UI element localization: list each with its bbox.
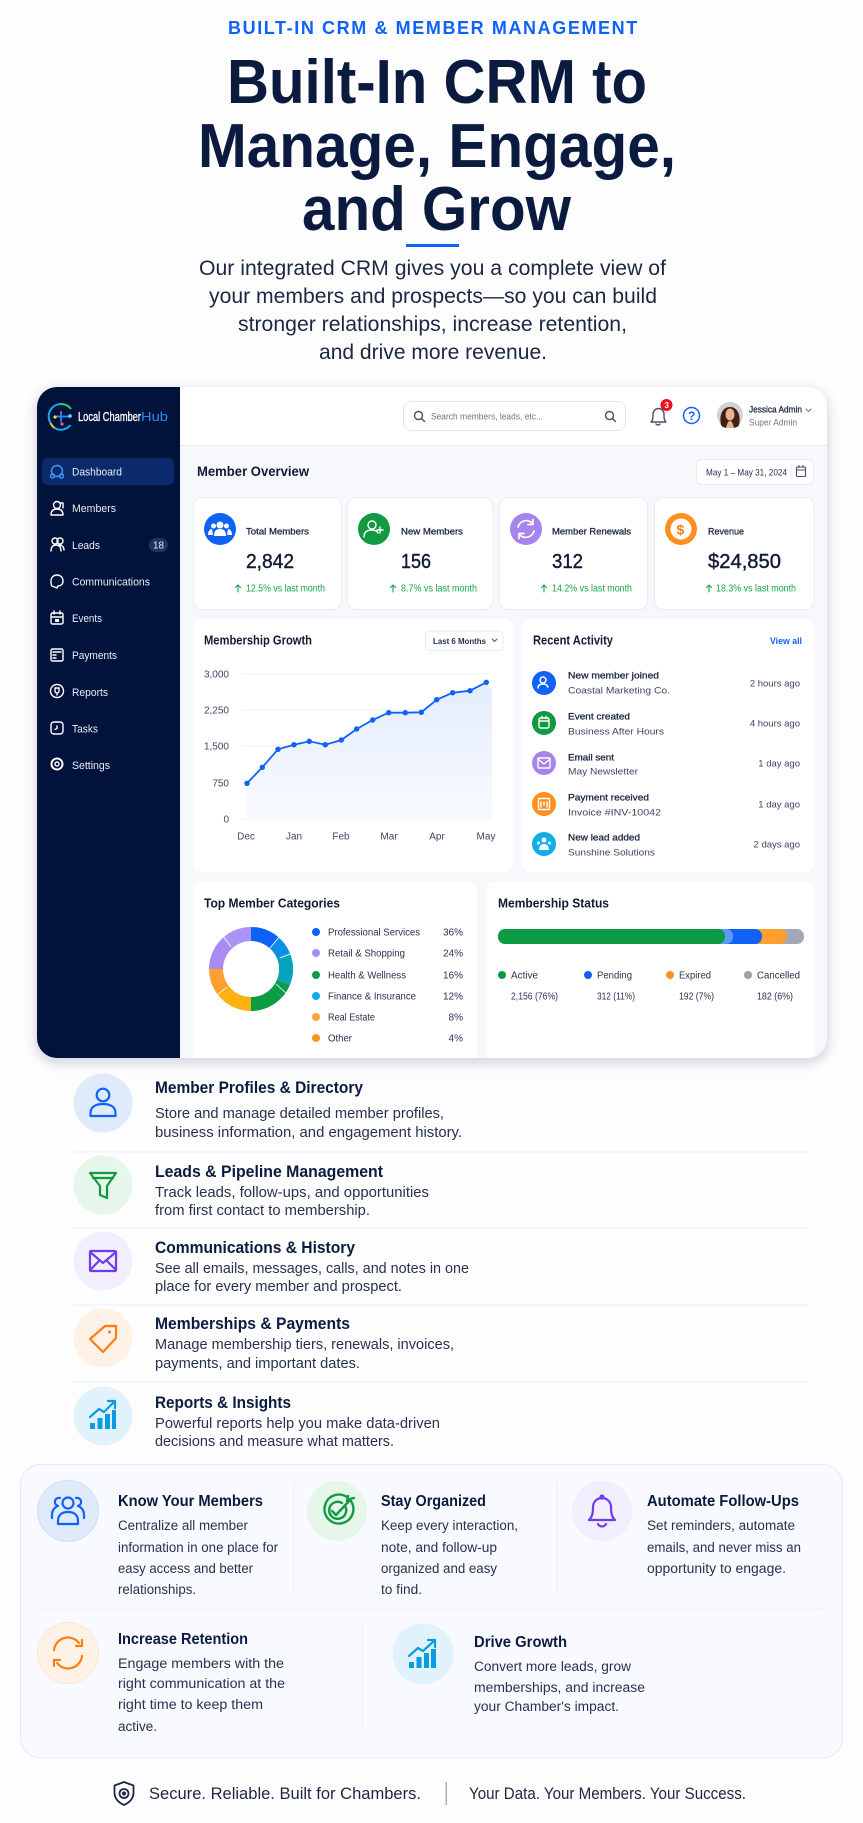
benefit: increase retention: active. (118, 1719, 157, 1734)
benefit: stay organized: Stay Organized (381, 1493, 486, 1510)
x axis labels: May (477, 832, 495, 842)
nav: communications (51, 575, 150, 588)
activity: payment received (532, 792, 800, 818)
nav: payments: Payments (72, 650, 117, 662)
benefit: know your members (38, 1480, 278, 1597)
nav: dashboard (50, 466, 122, 478)
KPI card: revenue: $24,850 (708, 551, 781, 573)
eyebrow heading: BUILT-IN CRM & MEMBER MANAGEMENT (228, 18, 639, 38)
line series (244, 680, 489, 786)
legend: 12% (443, 992, 463, 1002)
feature: member profiles: business information, and engagement history. (155, 1125, 462, 1141)
activity: new lead: 2 days ago (754, 840, 800, 850)
status legend: 312 (11%) (597, 992, 635, 1002)
activity: new member: Coastal Marketing Co. (568, 686, 670, 696)
range dropdown (426, 631, 503, 650)
panel: benefits (20, 1464, 842, 1758)
feature: member profiles: Store and manage detailed member profiles, (155, 1106, 444, 1122)
KPI card: new members (348, 498, 493, 610)
legend: Retail & Shopping (328, 948, 405, 960)
membership status content: Membership Status (498, 896, 609, 910)
nav: leads (51, 538, 168, 552)
KPI card: revenue: Revenue (708, 526, 744, 538)
KPI card: new members: New Members (401, 526, 463, 538)
benefit: automate follow-ups (572, 1481, 801, 1576)
logo: Local Chamber (78, 410, 141, 424)
section heading: Member Overview (197, 464, 309, 479)
title (198, 48, 676, 244)
benefit: automate follow-ups: emails, and never miss an (647, 1540, 801, 1555)
status legend: Pending (597, 970, 632, 982)
KPI card: member renewals (500, 498, 648, 610)
benefit: increase retention: Engage members with the (118, 1656, 284, 1671)
panel: recent activity: Recent Activity (533, 634, 613, 648)
nav: reports: Reports (72, 687, 108, 699)
feature: communications and history: Communications & History (155, 1239, 356, 1257)
title: Built-In CRM to (227, 48, 647, 117)
date range picker: May 1 – May 31, 2024 (706, 468, 787, 478)
benefit: drive growth: Convert more leads, grow (474, 1659, 631, 1674)
panel: membership growth chart (193, 619, 513, 872)
activity: email sent: Email sent (568, 752, 614, 764)
status legend: 192 (7%) (679, 992, 714, 1002)
nav: dashboard: Dashboard (72, 466, 122, 478)
activity: new member: New member joined (568, 670, 659, 682)
benefit: increase retention: Increase Retention (118, 1631, 248, 1648)
activity: new member: 2 hours ago (750, 678, 800, 690)
icon: notifications bell (651, 399, 672, 425)
y axis labels: 1,500 (204, 742, 229, 752)
benefit: know your members: information in one place for (118, 1540, 278, 1555)
KPI card: total members: Total Members (246, 526, 309, 538)
activity: new member (532, 670, 800, 696)
benefit: increase retention: right time to keep them (118, 1697, 263, 1712)
KPI card: total members: 12.5% vs last month (246, 584, 325, 594)
activity: email sent (532, 751, 800, 778)
intro paragraph (199, 257, 666, 364)
feature: communications and history (74, 1232, 469, 1295)
area under line (247, 682, 492, 819)
legend: Real Estate (328, 1012, 375, 1024)
activity: event created: 4 hours ago (750, 718, 800, 730)
sidebar navigation (42, 458, 174, 772)
legend: Health & Wellness (328, 970, 406, 982)
nav: members: Members (72, 503, 116, 515)
benefit: stay organized: Keep every interaction, (381, 1518, 518, 1533)
feature: leads and pipeline (74, 1156, 429, 1219)
KPI card: total members: 2,842 (246, 551, 294, 573)
user name: Jessica Admin (749, 404, 802, 416)
activity: new lead: New lead added (568, 832, 640, 844)
status legend: Cancelled (757, 970, 800, 982)
activity: payment received: Invoice #INV-10042 (568, 808, 661, 818)
icon: shield (114, 1782, 134, 1805)
feature: member profiles (74, 1074, 462, 1141)
top bar (404, 399, 811, 430)
stacked status bar (498, 929, 804, 944)
feature: reports and insights: Powerful reports help you make data-driven (155, 1416, 440, 1432)
feature: member profiles: Member Profiles & Directory (155, 1079, 364, 1097)
y axis labels: 2,250 (204, 706, 229, 716)
title: and Grow (302, 175, 572, 244)
benefit: stay organized (307, 1481, 518, 1597)
KPI card: member renewals: Member Renewals (552, 526, 631, 538)
logo (49, 404, 168, 430)
nav: tasks: Tasks (72, 724, 98, 736)
search box (404, 402, 626, 430)
nav: settings (52, 758, 110, 772)
KPI card: revenue (654, 498, 814, 610)
benefit: stay organized: organized and easy (381, 1561, 497, 1576)
status legend: Expired (679, 970, 711, 982)
benefit: know your members: Centralize all member (118, 1518, 248, 1533)
status legend: Active (511, 970, 538, 982)
x axis labels: Apr (429, 832, 445, 842)
nav: events (51, 611, 102, 625)
legend: 8% (449, 1012, 463, 1024)
feature: leads and pipeline: from first contact to membership. (155, 1203, 370, 1219)
icon: help (684, 408, 700, 424)
dashboard mockup (37, 387, 827, 1072)
intro paragraph: stronger relationships, increase retention, (238, 313, 627, 336)
intro paragraph: Our integrated CRM gives you a complete view of (199, 257, 666, 280)
x axis labels (237, 832, 495, 842)
panel: recent activity: View all (770, 636, 802, 647)
nav: reports (50, 684, 108, 699)
membership status content (498, 896, 804, 1002)
benefit: know your members: relationships. (118, 1582, 196, 1597)
legend: 4% (449, 1034, 463, 1044)
nav: events: Events (72, 613, 102, 625)
panel: recent activity (522, 619, 814, 872)
nav: leads: Leads (72, 540, 100, 552)
user name (749, 404, 811, 428)
y axis labels (204, 670, 229, 826)
benefit: know your members: Know Your Members (118, 1493, 263, 1510)
user avatar (717, 402, 743, 428)
title: Manage, Engage, (198, 112, 676, 181)
intro paragraph: and drive more revenue. (319, 341, 547, 364)
user name: Super Admin (749, 418, 797, 428)
activity: new lead: Sunshine Solutions (568, 848, 655, 858)
legend (312, 928, 463, 1044)
benefit: drive growth: Drive Growth (474, 1634, 567, 1651)
status legend: 182 (6%) (757, 992, 793, 1002)
panel: top member categories (193, 882, 477, 1072)
legend: 24% (443, 948, 463, 960)
KPI card: revenue: $ (676, 522, 684, 538)
x axis labels: Dec (237, 832, 255, 842)
status legend: 2,156 (76%) (511, 992, 558, 1002)
top member categories content: Top Member Categories (204, 896, 340, 910)
date range picker (696, 460, 814, 484)
footer tagline: Secure. Reliable. Built for Chambers. (149, 1784, 421, 1803)
feature: memberships and payments: payments, and important dates. (155, 1356, 360, 1372)
KPI card: member renewals: 14.2% vs last month (552, 584, 632, 594)
feature: communications and history: place for every member and prospect. (155, 1279, 402, 1295)
nav: communications: Communications (72, 576, 150, 588)
benefit: increase retention (38, 1622, 285, 1734)
benefit: know your members: easy access and better (118, 1561, 253, 1576)
feature: leads and pipeline: Track leads, follow-ups, and opportunities (155, 1185, 429, 1201)
feature: memberships and payments: Memberships & Payments (155, 1315, 350, 1333)
feature: memberships and payments (74, 1308, 454, 1372)
feature: communications and history: See all emails, messages, calls, and notes in one (155, 1261, 469, 1277)
legend: Professional Services (328, 928, 420, 938)
legend: Other (328, 1034, 353, 1044)
benefit: stay organized: to find. (381, 1582, 422, 1597)
activity: payment received: 1 day ago (758, 800, 800, 810)
feature: reports and insights: decisions and measure what matters. (155, 1434, 394, 1450)
panel: membership growth chart: Membership Growth (204, 634, 312, 648)
nav: settings: Settings (72, 760, 110, 772)
activity: email sent: 1 day ago (758, 758, 800, 770)
activity: payment received: Payment received (568, 792, 649, 804)
icon: help: ? (688, 409, 695, 423)
feature: memberships and payments: Manage membership tiers, renewals, invoices, (155, 1337, 454, 1353)
footer tagline: Your Data. Your Members. Your Success. (469, 1784, 746, 1803)
x axis labels: Feb (332, 832, 350, 842)
feature: leads and pipeline: Leads & Pipeline Management (155, 1163, 383, 1181)
footer tagline (114, 1782, 746, 1805)
feature: reports and insights: Reports & Insights (155, 1394, 291, 1412)
panel: membership status (486, 882, 814, 1072)
KPI card: member renewals: 312 (552, 551, 583, 573)
logo: Hub (141, 410, 168, 424)
y axis labels: 0 (223, 814, 229, 826)
KPI card: total members (194, 498, 342, 610)
intro paragraph: your members and prospects—so you can build (209, 285, 657, 308)
y axis labels: 3,000 (204, 670, 229, 680)
range dropdown: Last 6 Months (433, 636, 486, 646)
benefit: automate follow-ups: opportunity to engage. (647, 1561, 786, 1576)
status legend (498, 970, 800, 1002)
top member categories content (204, 896, 463, 1044)
KPI card: new members: 8.7% vs last month (401, 584, 477, 594)
KPI card: new members: 156 (401, 551, 431, 573)
benefit: increase retention: right communication at the (118, 1676, 285, 1691)
x axis labels: Jan (286, 832, 302, 842)
benefit: automate follow-ups: Automate Follow-Ups (647, 1493, 799, 1510)
icon: notifications bell: 3 (664, 401, 670, 410)
y axis labels: 750 (212, 778, 229, 790)
feature: reports and insights (74, 1386, 440, 1450)
legend: Finance & Insurance (328, 992, 416, 1002)
benefit: automate follow-ups: Set reminders, automate (647, 1518, 795, 1533)
benefit: drive growth: memberships, and increase (474, 1680, 645, 1695)
activity: email sent: May Newsletter (568, 766, 638, 778)
title accent underline (406, 244, 459, 247)
benefit: drive growth (392, 1624, 645, 1714)
activity: event created (532, 711, 800, 738)
activity: event created: Event created (568, 712, 630, 722)
x axis labels: Mar (380, 832, 398, 842)
benefit: drive growth: your Chamber's impact. (474, 1699, 619, 1714)
legend: 16% (443, 970, 463, 982)
donut chart (216, 934, 293, 1004)
KPI card: revenue: 18.3% vs last month (716, 584, 796, 594)
benefit: stay organized: note, and follow-up (381, 1540, 497, 1555)
activity: new lead (532, 832, 800, 858)
nav: tasks (51, 722, 98, 736)
nav: members (51, 502, 116, 515)
activity: event created: Business After Hours (568, 726, 664, 738)
nav: payments (51, 649, 117, 662)
legend: 36% (443, 928, 463, 938)
nav: leads: 18 (153, 540, 164, 552)
search box: Search members, leads, etc... (431, 412, 543, 422)
